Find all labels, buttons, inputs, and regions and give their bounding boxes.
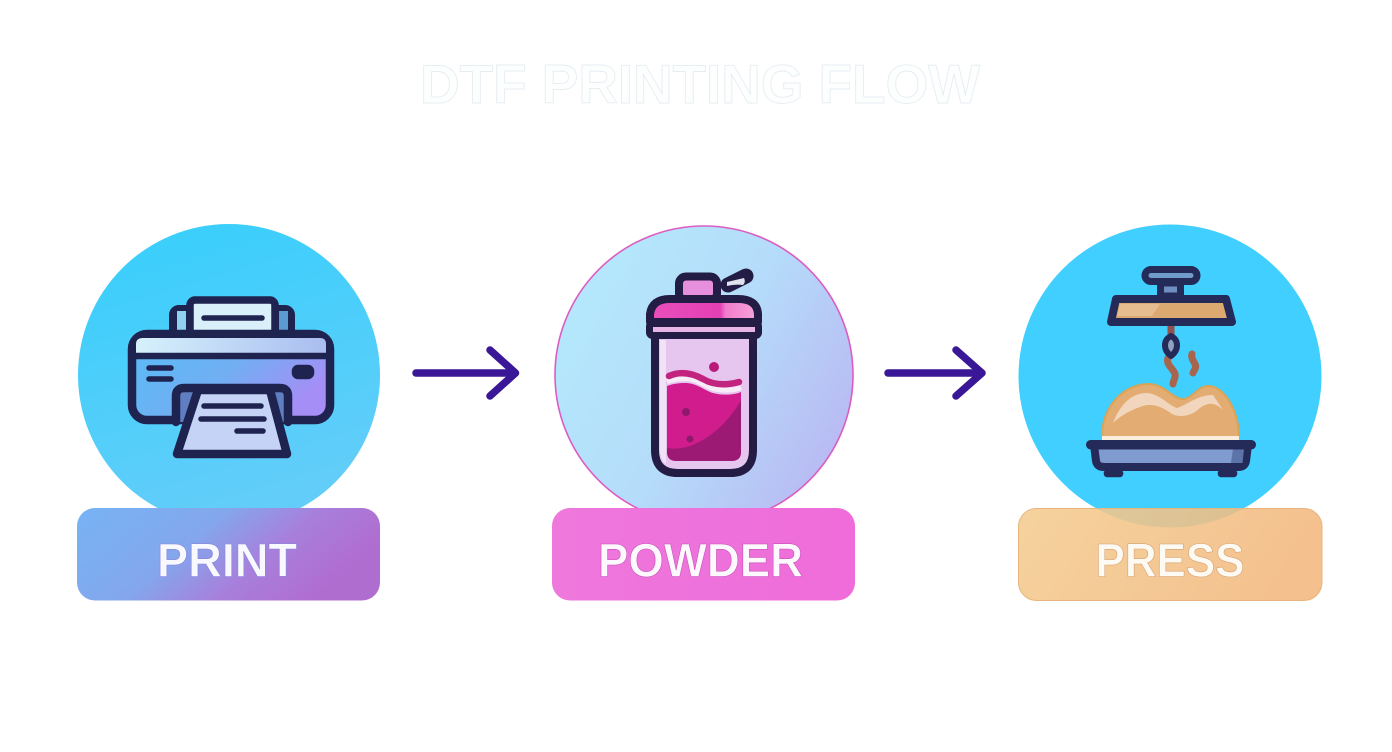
icon: powder bottle [650,276,758,473]
arrow: print to powder [416,350,516,396]
print circle [78,224,380,526]
icon: printer [132,300,330,454]
arrow: powder to press [888,350,982,396]
powder label: POWDER [598,534,803,586]
print label: PRINT [157,534,297,586]
step: press [1018,224,1322,600]
title: DTF PRINTING FLOW [420,53,980,115]
step: print [77,224,380,600]
icon: heat press [1088,270,1254,476]
powder label [552,508,855,600]
step: powder [552,226,855,600]
press circle [1018,224,1322,528]
powder circle [555,226,853,524]
print label [77,508,380,600]
press label [1018,508,1322,600]
press label: PRESS [1096,534,1244,586]
